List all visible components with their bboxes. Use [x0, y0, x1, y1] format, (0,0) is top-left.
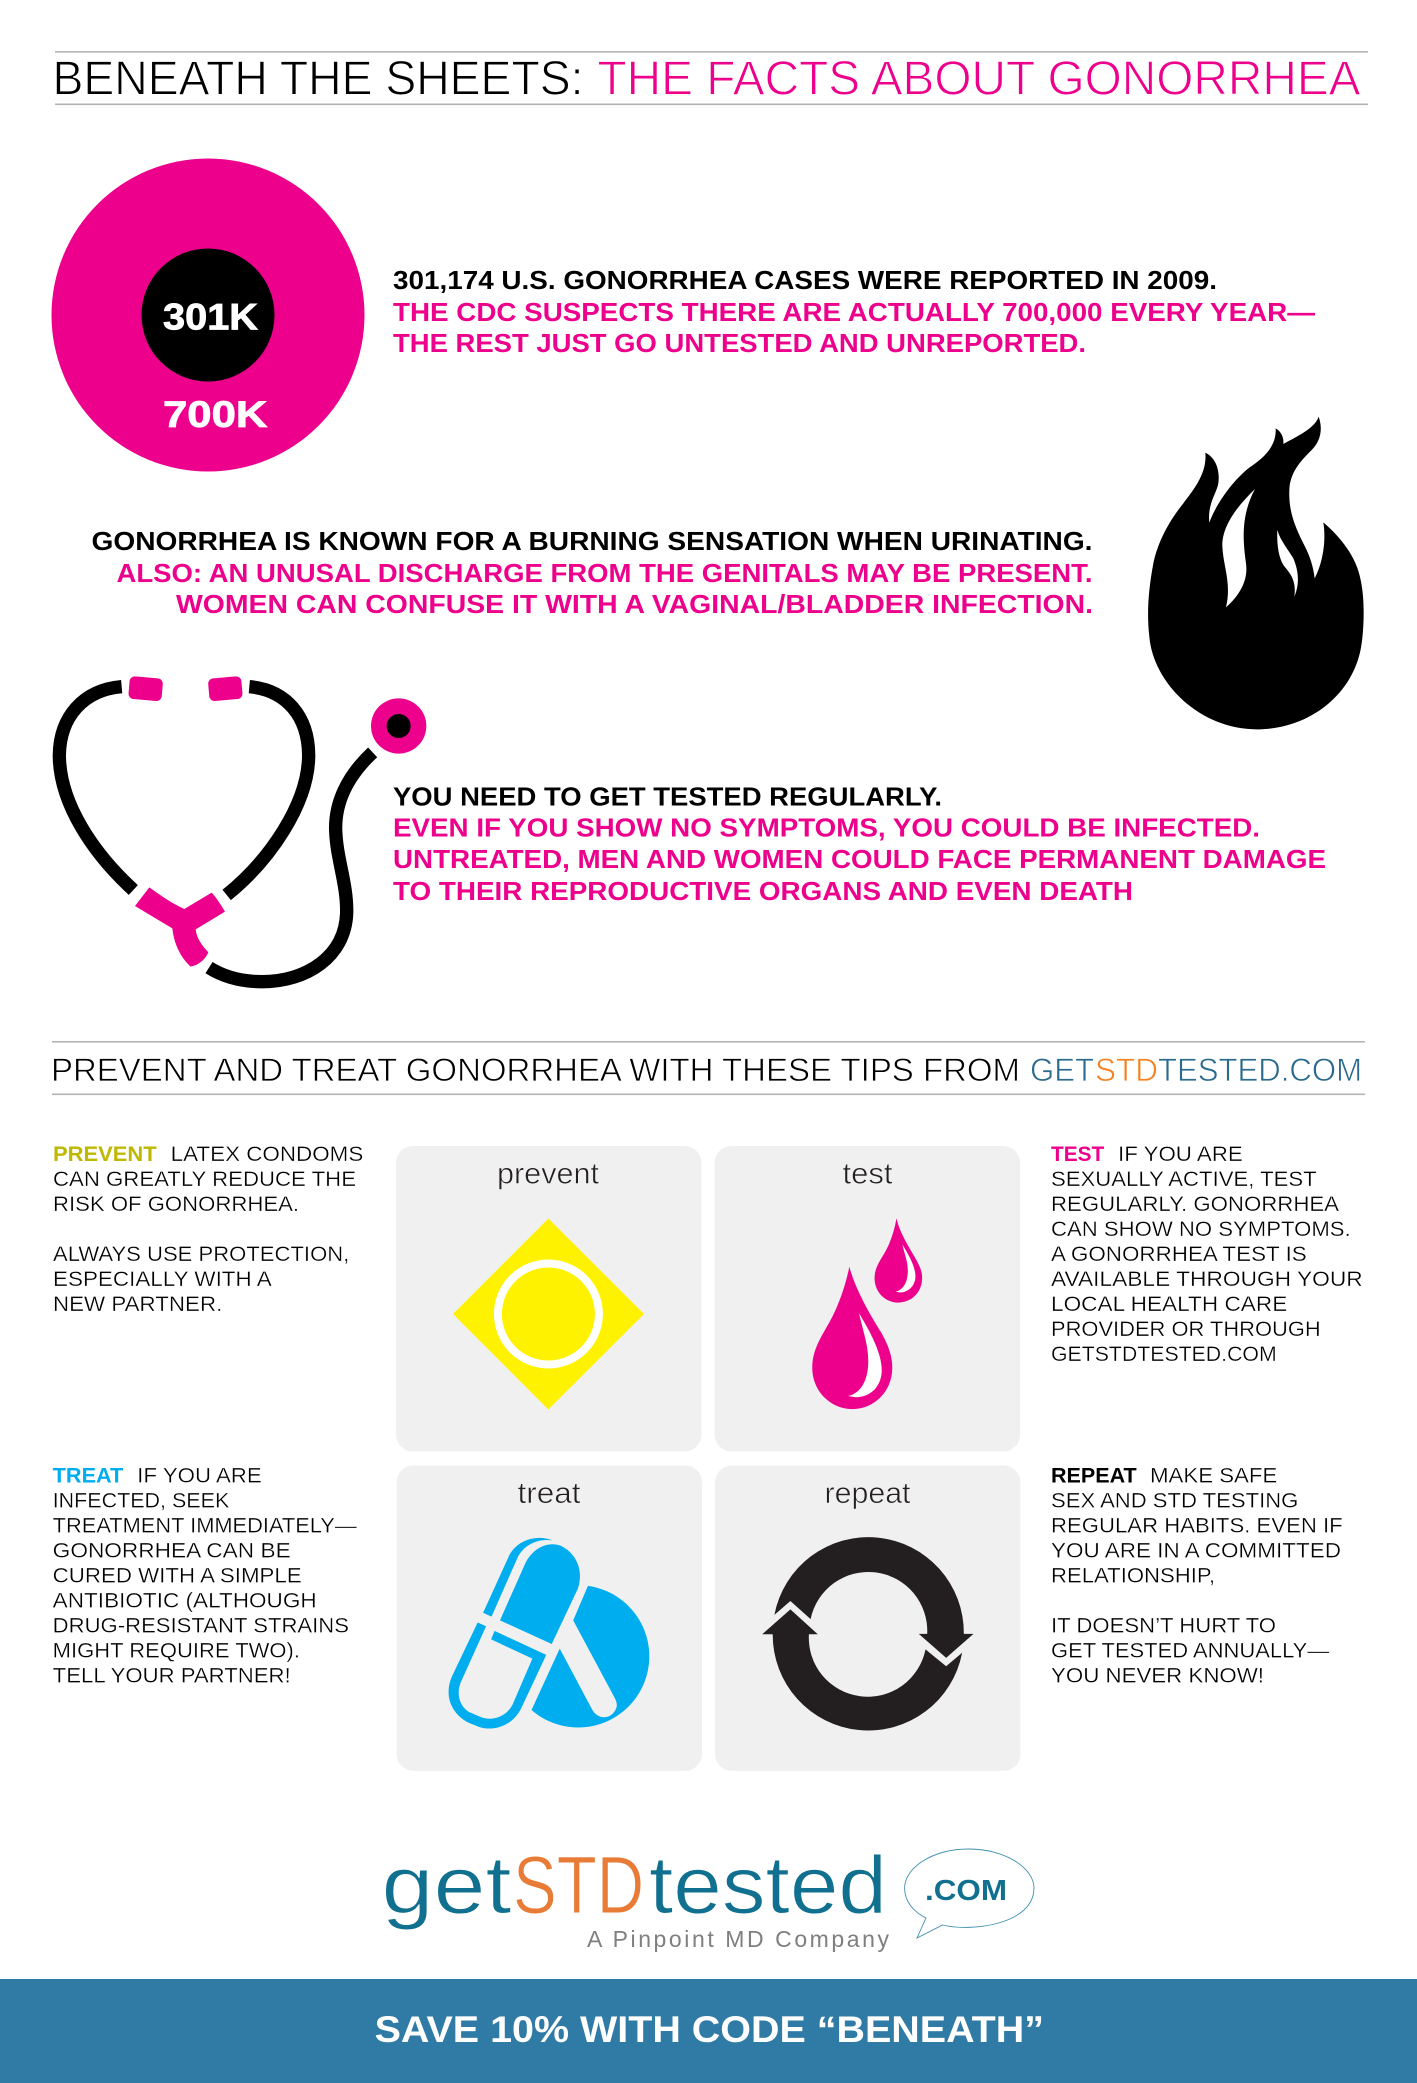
text block: repeat: [1051, 1465, 1343, 1688]
icon: cycle arrows: [762, 1537, 973, 1730]
text block: treat: CURED WITH A SIMPLE: [53, 1565, 302, 1588]
text block: treat: MIGHT REQUIRE TWO).: [53, 1640, 300, 1663]
text block: treat: TREATMENT IMMEDIATELY—: [53, 1515, 357, 1538]
text block: test: REGULARLY. GONORRHEA: [1051, 1193, 1339, 1216]
text block: burning sensation: ALSO: AN UNUSAL DISCHARGE FROM THE GENITALS MAY BE PRESENT.: [116, 558, 1092, 588]
icon: stethoscope: [59, 676, 426, 982]
section heading: tips: GET: [1030, 1052, 1094, 1088]
text block: reported cases: [393, 265, 1315, 358]
text block: burning sensation: [92, 526, 1093, 619]
text block: reported cases: 301,174 U.S. GONORRHEA CASES WERE REPORTED IN 2009.: [393, 265, 1217, 295]
section heading: tips: PREVENT AND TREAT GONORRHEA WITH THESE TIPS FROM: [51, 1052, 1020, 1088]
text block: test: SEXUALLY ACTIVE, TEST: [1051, 1168, 1317, 1191]
text block: treat: TELL YOUR PARTNER!: [53, 1665, 291, 1688]
logo: getSTDtested: get: [382, 1840, 512, 1931]
label: treat: treat: [518, 1477, 581, 1510]
panel: prevent: [396, 1146, 702, 1452]
text block: treat: TREAT: [53, 1465, 123, 1488]
logo: getSTDtested: [382, 1840, 887, 1931]
text block: get tested regularly: TO THEIR REPRODUCTIVE ORGANS AND EVEN DEATH: [393, 876, 1133, 906]
title: BENEATH THE SHEETS:: [52, 52, 584, 106]
text block: burning sensation: WOMEN CAN CONFUSE IT WITH A VAGINAL/BLADDER INFECTION.: [176, 589, 1093, 619]
text block: treat: ANTIBIOTIC (ALTHOUGH: [53, 1590, 317, 1613]
panel: repeat: [715, 1465, 1020, 1771]
label: test: test: [842, 1158, 893, 1190]
icon: flame: [1148, 417, 1364, 729]
logo speech bubble: .COM: [905, 1849, 1034, 1938]
text block: prevent: RISK OF GONORRHEA.: [53, 1193, 299, 1216]
text block: prevent: CAN GREATLY REDUCE THE: [53, 1168, 356, 1191]
chart: nested circles 301K vs 700K: [52, 158, 364, 472]
panel: treat: [396, 1465, 702, 1771]
text block: repeat: GET TESTED ANNUALLY—: [1051, 1640, 1329, 1663]
text block: prevent: [53, 1143, 363, 1316]
text block: test: CAN SHOW NO SYMPTOMS.: [1051, 1218, 1351, 1241]
logo speech bubble: .COM: .COM: [925, 1875, 1007, 1907]
title: [52, 52, 1360, 106]
text block: treat: [53, 1465, 357, 1688]
section heading: tips: STD: [1095, 1052, 1158, 1088]
text block: burning sensation: GONORRHEA IS KNOWN FOR A BURNING SENSATION WHEN URINATING.: [92, 526, 1092, 556]
text block: get tested regularly: [393, 782, 1326, 906]
text block: get tested regularly: EVEN IF YOU SHOW NO SYMPTOMS, YOU COULD BE INFECTED.: [393, 813, 1260, 843]
text block: prevent: ALWAYS USE PROTECTION,: [53, 1243, 349, 1266]
text block: treat: DRUG-RESISTANT STRAINS: [53, 1615, 349, 1638]
logo: getSTDtested: tested: [649, 1840, 887, 1931]
text block: prevent: NEW PARTNER.: [53, 1293, 222, 1316]
text block: test: PROVIDER OR THROUGH: [1051, 1318, 1321, 1341]
text block: prevent: ESPECIALLY WITH A: [53, 1268, 272, 1291]
icon: pills: [449, 1538, 649, 1729]
text block: repeat: REPEAT: [1051, 1465, 1137, 1488]
title: THE FACTS ABOUT GONORRHEA: [598, 52, 1360, 106]
text block: reported cases: THE CDC SUSPECTS THERE ARE ACTUALLY 700,000 EVERY YEAR—: [393, 297, 1315, 327]
label: prevent: prevent: [497, 1158, 600, 1190]
text block: repeat: MAKE SAFE: [1150, 1465, 1277, 1488]
text block: test: LOCAL HEALTH CARE: [1051, 1293, 1287, 1316]
footer banner: [0, 1979, 1417, 2083]
text block: get tested regularly: YOU NEED TO GET TESTED REGULARLY.: [393, 782, 942, 812]
section heading: tips: TESTED.COM: [1158, 1052, 1362, 1088]
text block: treat: IF YOU ARE: [137, 1465, 262, 1488]
label: 700K: 700K: [163, 394, 268, 435]
text block: test: IF YOU ARE: [1118, 1143, 1243, 1166]
text block: repeat: RELATIONSHIP,: [1051, 1565, 1215, 1588]
text block: test: [1051, 1143, 1363, 1366]
text block: prevent: PREVENT: [53, 1143, 157, 1166]
text block: repeat: REGULAR HABITS. EVEN IF: [1051, 1515, 1343, 1538]
text block: repeat: SEX AND STD TESTING: [1051, 1490, 1298, 1513]
footer banner: SAVE 10% WITH CODE “BENEATH”: [375, 2009, 1044, 2050]
label: repeat: repeat: [824, 1477, 911, 1510]
text block: test: TEST: [1051, 1143, 1104, 1166]
text block: test: A GONORRHEA TEST IS: [1051, 1243, 1307, 1266]
text block: treat: INFECTED, SEEK: [53, 1490, 229, 1513]
text block: repeat: YOU ARE IN A COMMITTED: [1051, 1540, 1341, 1563]
icon: drops: [812, 1218, 922, 1409]
label: 301K: 301K: [163, 296, 258, 338]
text block: repeat: IT DOESN’T HURT TO: [1051, 1615, 1276, 1638]
text block: test: AVAILABLE THROUGH YOUR: [1051, 1268, 1363, 1291]
logo: getSTDtested: STD: [513, 1840, 644, 1931]
text block: reported cases: THE REST JUST GO UNTESTED AND UNREPORTED.: [393, 328, 1086, 358]
text block: get tested regularly: UNTREATED, MEN AND WOMEN COULD FACE PERMANENT DAMAGE: [393, 844, 1326, 874]
text block: test: GETSTDTESTED.COM: [1051, 1343, 1277, 1366]
text block: treat: GONORRHEA CAN BE: [53, 1540, 291, 1563]
panel: test: [715, 1146, 1020, 1452]
text block: repeat: YOU NEVER KNOW!: [1051, 1665, 1264, 1688]
logo tagline: A Pinpoint MD Company: [587, 1926, 890, 1952]
text block: prevent: LATEX CONDOMS: [171, 1143, 363, 1166]
icon: condom wrapper: [453, 1218, 644, 1410]
